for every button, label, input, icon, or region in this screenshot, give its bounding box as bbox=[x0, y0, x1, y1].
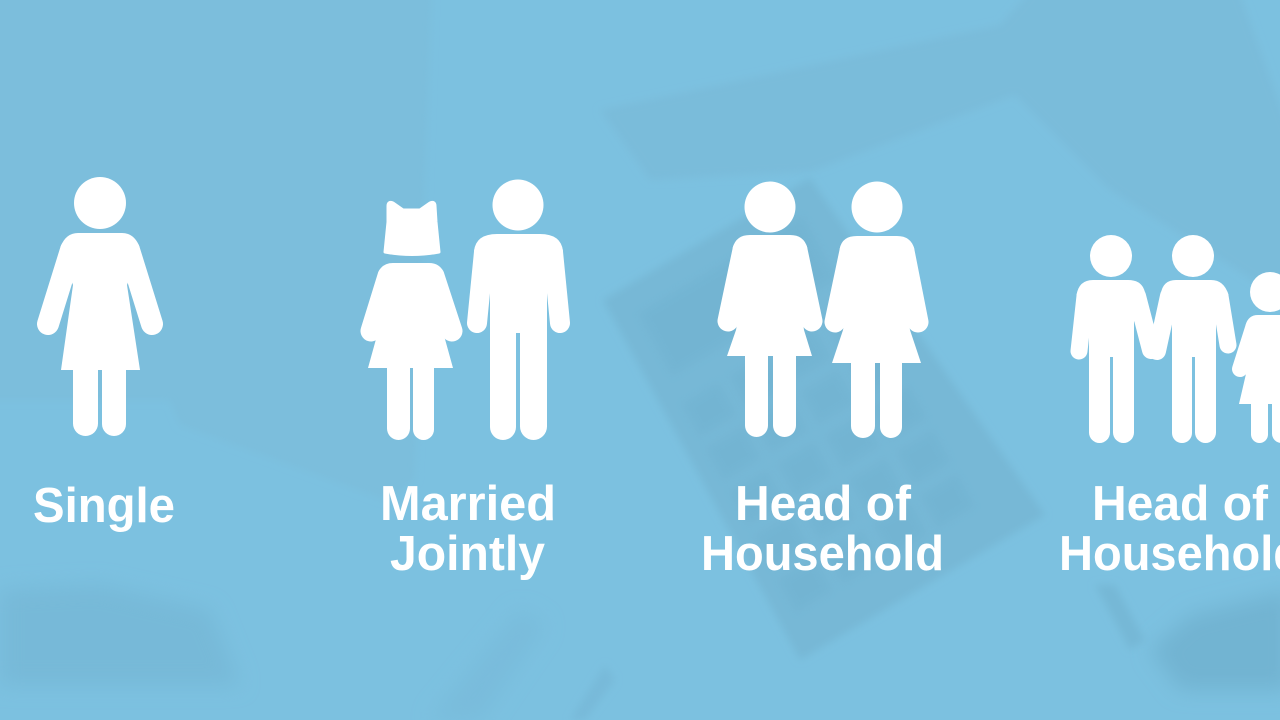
label: Head of Household: Head of bbox=[735, 477, 912, 531]
label: Head of Household bbox=[701, 477, 944, 581]
icon: family figures holding hands bbox=[1076, 235, 1280, 443]
icon: woman figure bbox=[48, 177, 152, 436]
label: Married Jointly bbox=[380, 477, 556, 581]
panel: single bbox=[33, 177, 175, 533]
label: Married Jointly: Jointly bbox=[390, 527, 545, 581]
label: Head of Household: Head of bbox=[1092, 477, 1269, 531]
icon: two women figures bbox=[727, 182, 921, 438]
label: Head of Household bbox=[1059, 477, 1280, 581]
label: Single: Single bbox=[33, 479, 175, 533]
panel: married jointly bbox=[368, 180, 563, 581]
label: Head of Household: Household bbox=[701, 527, 944, 581]
label: Married Jointly: Married bbox=[380, 477, 556, 531]
panel: head of household, two women bbox=[701, 182, 944, 581]
icon: woman and man figures bbox=[368, 180, 563, 440]
panel: head of household, family bbox=[1059, 235, 1280, 581]
